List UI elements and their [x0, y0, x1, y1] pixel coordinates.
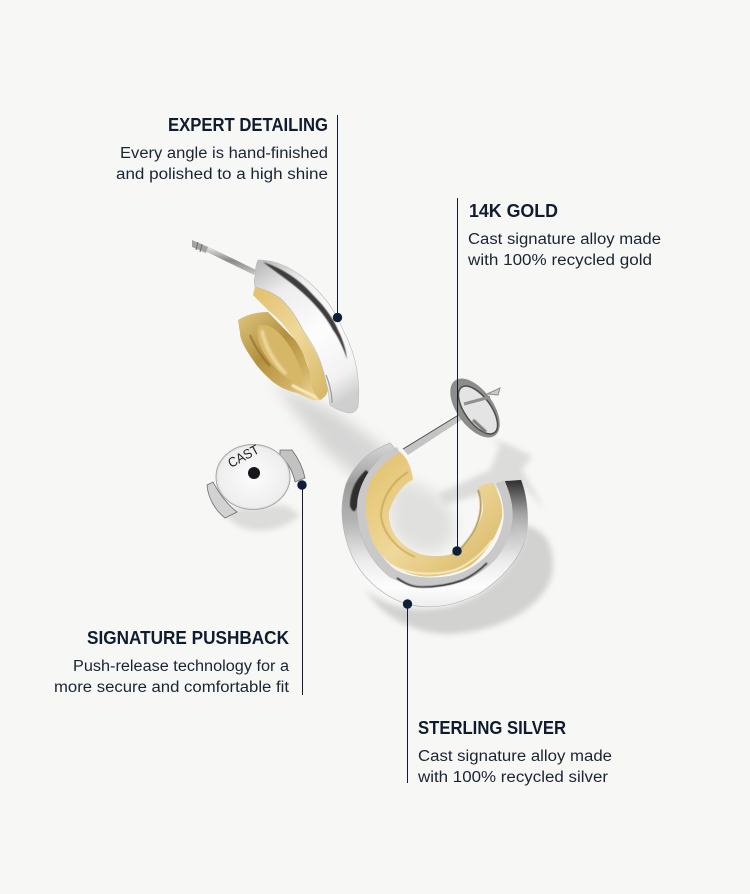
text block: Every angle is hand-finished — [120, 145, 328, 162]
icon: right earring post — [403, 408, 472, 455]
icon: left earring post — [192, 240, 256, 275]
heading: STERLING SILVER — [418, 718, 566, 738]
callout: 14k gold — [452, 198, 661, 556]
shadow of post — [437, 438, 545, 510]
callout: signature pushback — [54, 480, 307, 696]
icon: pushback wings — [207, 450, 305, 518]
leader line — [456, 198, 458, 551]
icon: gold lower bright line — [392, 540, 492, 574]
icon: gold inner dark edge — [452, 490, 481, 554]
heading: 14K GOLD — [469, 201, 558, 221]
leader dot — [452, 546, 462, 556]
leader line — [336, 115, 338, 317]
icon: silver rim dark line — [397, 563, 487, 587]
cast shadows — [222, 382, 553, 634]
callout: expert detailing — [116, 115, 342, 322]
icon: left earring silver body — [254, 260, 359, 413]
pushback backing — [207, 442, 305, 518]
leader dot — [403, 599, 412, 609]
icon: silver dark reflection — [350, 470, 370, 511]
icon: right earring backing — [440, 370, 510, 446]
text block: with 100% recycled gold — [467, 252, 652, 269]
text block: and polished to a high shine — [116, 166, 328, 183]
text block: Cast signature alloy made — [468, 231, 661, 248]
leader dot — [333, 313, 342, 322]
icon: left earring dark reflection — [263, 262, 347, 359]
icon: gold inner lip line — [381, 472, 415, 557]
heading: SIGNATURE PUSHBACK — [87, 628, 289, 648]
icon: left earring gold lip — [253, 287, 328, 400]
icon: left earring lower highlight — [326, 375, 332, 403]
text block: Push-release technology for a — [73, 658, 289, 675]
icon: silver inner rim — [362, 451, 508, 582]
shadow of left earring — [272, 382, 390, 482]
leader line — [406, 604, 408, 783]
shadow inside hoop — [389, 481, 455, 552]
icon: left earring gold interior — [238, 312, 320, 400]
right earring — [342, 370, 528, 607]
icon: right earring silver hoop — [342, 443, 528, 607]
shadow of pushback — [222, 505, 300, 531]
icon: pushback disc — [216, 444, 290, 510]
icon: pushback centre hole — [248, 467, 260, 479]
text block: with 100% recycled silver — [417, 769, 608, 786]
text block: Cast signature alloy made — [418, 748, 612, 765]
leader line — [302, 485, 304, 695]
leader dot — [297, 480, 307, 490]
icon: right earring gold band — [366, 452, 502, 577]
left earring — [192, 240, 359, 413]
icon: silver top-right dark tip — [505, 480, 528, 548]
text block: more secure and comfortable fit — [54, 679, 290, 696]
logo text: CAST — [225, 442, 262, 471]
callout: sterling silver — [403, 599, 612, 786]
heading: EXPERT DETAILING — [168, 115, 328, 135]
shadow of hoop — [366, 525, 553, 634]
